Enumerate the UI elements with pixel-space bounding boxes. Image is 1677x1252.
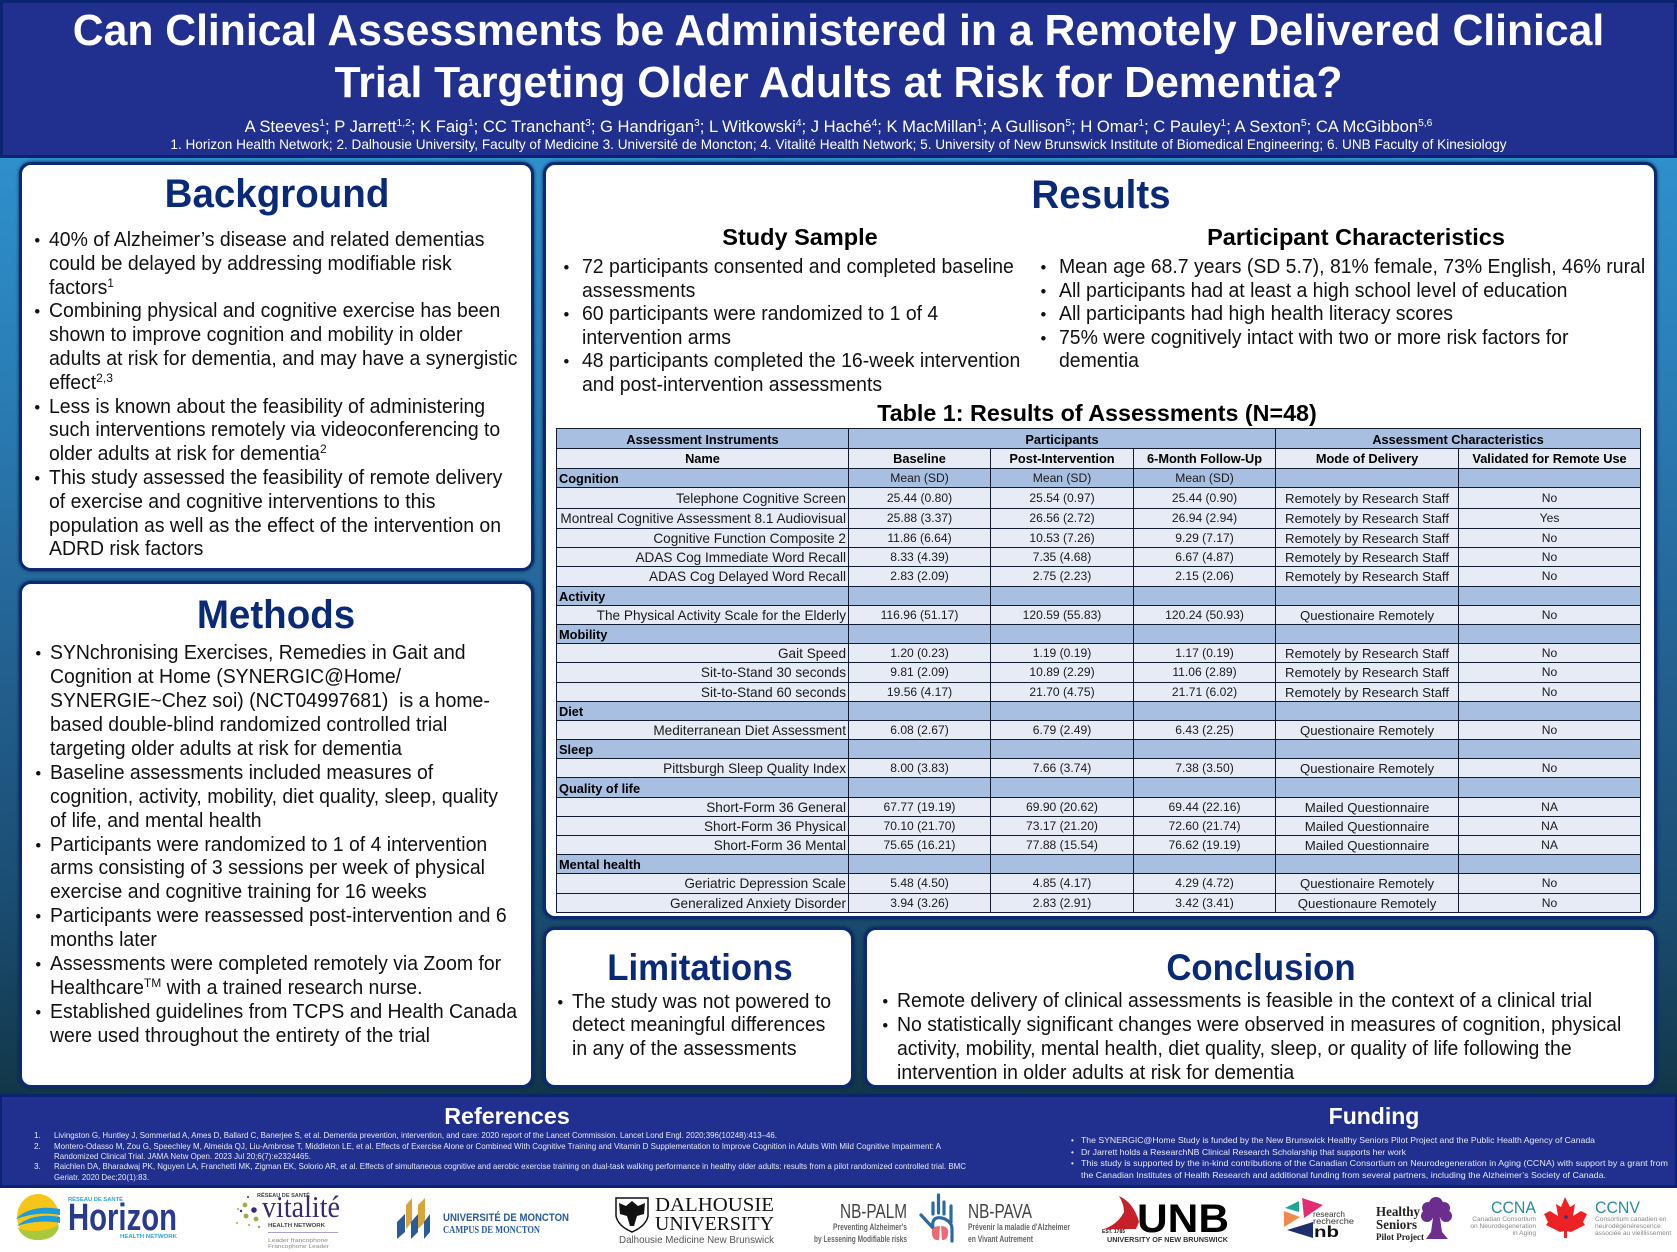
heading: limitations: Limitations — [607, 947, 792, 988]
table: results of assessments: Baseline — [893, 451, 946, 466]
logo: University of New Brunswick: UNIVERSITY OF NEW BRUNSWICK — [1107, 1235, 1229, 1244]
limitations bullet list: The study was not powered to — [572, 990, 831, 1012]
table: results of assessments: Gait Speed — [778, 646, 846, 661]
methods bullet list: exercise and cognitive training for 16 weeks — [50, 881, 427, 903]
logo: Vitalité Health Network: Francophone Leader — [268, 1244, 329, 1250]
table: results of assessments: 25.88 (3.37) — [887, 511, 952, 525]
subheading: study sample: Study Sample — [722, 224, 878, 250]
table: results of assessments: 6.08 (2.67) — [890, 723, 949, 737]
title: Can Clinical Assessments be Administered in a Remotely Delivered Clinical — [73, 6, 1604, 55]
conclusion bullet list: No statistically significant changes were observed in measures of cognition, physical — [897, 1014, 1621, 1036]
table: results of assessments: Remotely by Research Staff — [1285, 646, 1449, 661]
study sample bullet list: 60 participants were randomized to 1 of 4 — [582, 303, 938, 325]
table: results of assessments: Diet — [559, 704, 583, 719]
table: results of assessments: Mental health — [559, 857, 641, 872]
table: results of assessments: Validated for Remote Use — [1472, 451, 1627, 466]
logo: NB-PALM / NB-PAVA: NB-PAVA — [968, 1201, 1032, 1223]
table: results of assessments: No — [1542, 531, 1557, 545]
table: results of assessments: 6.43 (2.25) — [1175, 723, 1234, 737]
methods bullet list: Baseline assessments included measures of — [50, 762, 433, 784]
table: results of assessments: 6.67 (4.87) — [1175, 550, 1234, 564]
table: results of assessments: Questionaire Remotely — [1300, 608, 1434, 623]
authors: A Steeves1; P Jarrett1,2; K Faig1; CC Tranchant3; G Handrigan3; L Witkowski4; J Haché4; K MacMillan1; A Gullison5; H Omar1; C Pauley1; A Sexton5; CA McGibbon5,6 — [245, 117, 1432, 136]
table: results of assessments: No — [1542, 665, 1557, 679]
logo: Dalhousie University — [616, 1194, 775, 1246]
table: results of assessments: Mean (SD) — [1033, 471, 1091, 485]
table: results of assessments: Pittsburgh Sleep Quality Index — [663, 761, 846, 776]
methods bullet list: Participants were randomized to 1 of 4 intervention — [50, 834, 487, 856]
table: results of assessments: No — [1542, 646, 1557, 660]
background bullet list — [35, 229, 517, 560]
methods bullet list: months later — [50, 929, 157, 951]
table: results of assessments: Mediterranean Diet Assessment — [653, 723, 846, 738]
logo: CCNA / CCNV: Canadian Consortium — [1472, 1216, 1536, 1223]
participant characteristics bullet list — [1041, 256, 1645, 372]
table: results of assessments: 7.38 (3.50) — [1175, 761, 1234, 775]
table: results of assessments: Remotely by Research Staff — [1285, 511, 1449, 526]
table: results of assessments: No — [1542, 685, 1557, 699]
table: results of assessments: Remotely by Research Staff — [1285, 685, 1449, 700]
background bullet list: shown to improve cognition and mobility in older — [49, 324, 462, 346]
table: results of assessments: No — [1542, 491, 1557, 505]
logo: Vitalité Health Network: vitalité — [262, 1189, 340, 1224]
background bullet list: of exercise and cognitive interventions to this — [49, 491, 435, 513]
panel: results — [543, 162, 1657, 919]
table: results of assessments: 73.17 (21.20) — [1026, 819, 1098, 833]
funding list: This study is supported by the in-kind contributions of the Canadian Consortium on Neurodegeneration in Aging (CCNA) with support by a grant from — [1081, 1159, 1668, 1168]
logo: NB-PALM / NB-PAVA: Prévenir la maladie d'Alzheimer — [968, 1222, 1070, 1232]
panel: background — [19, 162, 534, 571]
table: results of assessments: Quality of life — [559, 781, 640, 796]
study sample bullet list: 48 participants completed the 16-week intervention — [582, 350, 1020, 372]
logo: CCNA / CCNV: CCNA — [1491, 1198, 1537, 1217]
table: results of assessments: Remotely by Research Staff — [1285, 491, 1449, 506]
table: results of assessments: Telephone Cognitive Screen — [676, 491, 846, 506]
table: results of assessments: 2.75 (2.23) — [1033, 569, 1091, 583]
logo: Université de Moncton: UNIVERSITÉ DE MONCTON — [443, 1211, 569, 1224]
methods bullet list: Cognition at Home (SYNERGIC@Home/ — [50, 666, 401, 688]
logo: NB-PALM / NB-PAVA: en Vivant Autrement — [968, 1234, 1033, 1244]
title — [73, 6, 1604, 107]
table: results of assessments: No — [1542, 761, 1557, 775]
participant characteristics bullet list: All participants had at least a high school level of education — [1059, 280, 1567, 302]
table: results of assessments: Assessment Characteristics — [1372, 432, 1544, 446]
methods bullet list: SYNERGIE~Chez soi) (NCT04997681) is a home- — [50, 690, 490, 712]
table: results of assessments: Short-Form 36 General — [706, 800, 846, 815]
methods bullet list: HealthcareTM with a trained research nurse. — [50, 976, 423, 999]
table: results of assessments: Mailed Questionnaire — [1305, 838, 1429, 853]
funding list: Dr Jarrett holds a ResearchNB Clinical Research Scholarship that supports her work — [1081, 1148, 1407, 1157]
heading: results: Results — [1031, 173, 1171, 217]
logo: NB-PALM / NB-PAVA — [814, 1195, 1070, 1244]
logo: Healthy Seniors Pilot Project — [1376, 1197, 1452, 1243]
table: results of assessments: No — [1542, 550, 1557, 564]
background bullet list: older adults at risk for dementia2 — [49, 442, 327, 465]
logo: CCNA / CCNV: on Neurodegeneration — [1470, 1223, 1536, 1230]
table: results of assessments: No — [1542, 876, 1557, 890]
panel: conclusion — [864, 927, 1657, 1088]
background bullet list: ADRD risk factors — [49, 538, 203, 560]
panel: limitations — [543, 927, 854, 1088]
logo: Research NB: research — [1313, 1209, 1345, 1219]
logo: Dalhousie University: UNIVERSITY — [655, 1213, 774, 1235]
table: results of assessments: ADAS Cog Delayed Word Recall — [649, 569, 846, 584]
panel: methods — [19, 581, 534, 1088]
table: results of assessments: Questionaure Remotely — [1298, 896, 1436, 911]
background bullet list: such interventions remotely via videoconferencing to — [49, 419, 500, 441]
table: results of assessments: Short-Form 36 Mental — [714, 838, 846, 853]
logo: Horizon Health Network — [16, 1194, 177, 1240]
participant characteristics bullet list: dementia — [1059, 350, 1139, 372]
methods bullet list: targeting older adults at risk for dementia — [50, 738, 402, 760]
footer text — [34, 1103, 1668, 1182]
table: results of assessments: 72.60 (21.74) — [1169, 819, 1240, 833]
conclusion bullet list: Remote delivery of clinical assessments is feasible in the context of a clinical trial — [897, 990, 1592, 1012]
conclusion bullet list: activity, mobility, mental health, diet quality, sleep, or quality of life following the — [897, 1038, 1572, 1060]
limitations bullet list — [558, 990, 831, 1060]
table: results of assessments: 8.00 (3.83) — [890, 761, 949, 775]
logo: Vitalité Health Network — [236, 1189, 340, 1250]
methods bullet list: Participants were reassessed post-intervention and 6 — [50, 905, 507, 927]
methods bullet list: Established guidelines from TCPS and Health Canada — [50, 1001, 517, 1023]
reference list: Montero-Odasso M, Zou G, Speechley M, Almeida QJ, Liu-Ambrose T, Middleton LE, et al. Effects of Exercise Alone or Combined With Cognitive Training and Vitamin D Supplementation to Improve Cognition in Adults With Mild Cognitive Impairment: A — [54, 1142, 942, 1151]
logo: Healthy Seniors Pilot Project: Pilot Project — [1376, 1233, 1425, 1243]
participant characteristics bullet list: Mean age 68.7 years (SD 5.7), 81% female, 73% English, 46% rural — [1059, 256, 1645, 278]
logo: Université de Moncton: CAMPUS DE MONCTON — [443, 1225, 541, 1236]
heading: conclusion: Conclusion — [1166, 947, 1355, 988]
methods bullet list: based double-blind randomized controlled trial — [50, 714, 447, 736]
table: results of assessments: 1.17 (0.19) — [1175, 646, 1234, 660]
logo: CCNA / CCNV: associée au vieillissement — [1595, 1230, 1671, 1237]
logo strip — [16, 1189, 1672, 1250]
logo: Horizon Health Network: Horizon — [68, 1197, 177, 1239]
methods bullet list: arms consisting of 3 sessions per week of physical — [50, 857, 485, 879]
reference list: Geriatr. 2020 Dec;20(1):83. — [54, 1173, 149, 1182]
logo: Dalhousie University: Dalhousie Medicine New Brunswick — [619, 1235, 775, 1246]
table: results of assessments: ADAS Cog Immediate Word Recall — [635, 550, 846, 565]
table: results of assessments: 3.42 (3.41) — [1175, 896, 1234, 910]
table: results of assessments: 75.65 (16.21) — [884, 838, 955, 852]
table: results of assessments: 21.70 (4.75) — [1029, 685, 1095, 699]
background bullet list: Less is known about the feasibility of administering — [49, 396, 485, 418]
table: results of assessments: Remotely by Research Staff — [1285, 569, 1449, 584]
study sample bullet list: 72 participants consented and completed baseline — [582, 256, 1014, 278]
background bullet list: adults at risk for dementia, and may have a synergistic — [49, 348, 517, 370]
logo: Research NB — [1284, 1198, 1354, 1241]
logo: CCNA / CCNV: CCNV — [1595, 1198, 1641, 1217]
participant characteristics bullet list: 75% were cognitively intact with two or more risk factors for — [1059, 327, 1568, 349]
background bullet list: population as well as the effect of the intervention on — [49, 515, 501, 537]
table: results of assessments: 3.94 (3.26) — [890, 896, 949, 910]
reference list — [34, 1131, 966, 1182]
table: results of assessments: Mean (SD) — [890, 471, 949, 485]
title: Trial Targeting Older Adults at Risk for Dementia? — [335, 58, 1342, 107]
table: results of assessments: Participants — [1025, 432, 1099, 446]
table: results of assessments: Yes — [1540, 511, 1559, 525]
table: results of assessments: Remotely by Research Staff — [1285, 550, 1449, 565]
table: results of assessments: 2.83 (2.09) — [890, 569, 949, 583]
table: results of assessments: Sit-to-Stand 30 seconds — [701, 665, 846, 680]
study sample bullet list: assessments — [582, 280, 695, 302]
logo: Vitalité Health Network: Leader francophone — [268, 1238, 328, 1244]
table: results of assessments: Activity — [559, 589, 605, 604]
table: results of assessments: 120.24 (50.93) — [1165, 608, 1244, 622]
table: results of assessments: 4.29 (4.72) — [1175, 876, 1234, 890]
funding list — [1071, 1136, 1668, 1180]
background bullet list: Combining physical and cognitive exercise has been — [49, 300, 500, 322]
logo: CCNA / CCNV: in Aging — [1513, 1230, 1536, 1237]
heading: methods: Methods — [197, 593, 355, 637]
logo: CCNA / CCNV: neurodégénérescence — [1595, 1223, 1661, 1230]
table: results of assessments: 11.86 (6.64) — [887, 531, 952, 545]
table: results of assessments: 21.71 (6.02) — [1172, 685, 1237, 699]
reference list: Livingston G, Huntley J, Sommerlad A, Ames D, Ballard C, Banerjee S, et al. Dementia prevention, intervention, and care: 2020 report of the Lancet Commission. Lancet Lond Engl. 2020;396(10248):413–46. — [54, 1131, 777, 1140]
affiliations: 1. Horizon Health Network; 2. Dalhousie University, Faculty of Medicine 3. Université de Moncton; 4. Vitalité Health Network; 5. University of New Brunswick Institute of Biomedical Engineering; 6. UNB Faculty of Kinesiology — [170, 136, 1507, 152]
funding list: the Canadian Institutes of Health Research and additional funding from several partners, including the Alzheimer’s Society of Canada. — [1081, 1171, 1606, 1180]
logo: Horizon Health Network: RÉSEAU DE SANTÉ — [68, 1195, 123, 1203]
table: results of assessments: 116.96 (51.17) — [881, 608, 958, 622]
study sample bullet list — [564, 256, 1020, 396]
logo: Research NB: nb — [1314, 1224, 1339, 1241]
table: results of assessments: Questionaire Remotely — [1300, 723, 1434, 738]
table: results of assessments: 11.06 (2.89) — [1172, 665, 1237, 679]
table: results of assessments: 19.56 (4.17) — [887, 685, 952, 699]
reference list: 3. — [34, 1162, 41, 1171]
table: results of assessments: No — [1542, 569, 1557, 583]
table: results of assessments: The Physical Activity Scale for the Elderly — [597, 608, 846, 623]
table: results of assessments: 69.44 (22.16) — [1169, 800, 1240, 814]
table: results of assessments: NA — [1541, 800, 1558, 814]
table: results of assessments: 25.44 (0.90) — [1172, 491, 1237, 505]
table: results of assessments: 10.53 (7.26) — [1029, 531, 1095, 545]
table: results of assessments: Mobility — [559, 627, 607, 642]
table: results of assessments: 76.62 (19.19) — [1169, 838, 1240, 852]
table: results of assessments: 7.66 (3.74) — [1033, 761, 1091, 775]
table: results of assessments: Geriatric Depression Scale — [684, 876, 846, 891]
funding list: The SYNERGIC@Home Study is funded by the New Brunswick Healthy Seniors Pilot Project and the Public Health Agency of Canada — [1081, 1136, 1595, 1145]
table: results of assessments: 69.90 (20.62) — [1026, 800, 1098, 814]
logo: Research NB: recherche — [1313, 1216, 1354, 1226]
conclusion bullet list — [883, 990, 1621, 1084]
logo: NB-PALM / NB-PAVA: NB-PALM — [840, 1201, 907, 1223]
study sample bullet list: and post-intervention assessments — [582, 374, 882, 396]
logo: CCNA / CCNV: Consortium canadien en — [1595, 1216, 1667, 1223]
table: results of assessments: Cognition — [559, 471, 619, 486]
logo: NB-PALM / NB-PAVA: by Lessening Modifiable risks — [814, 1234, 907, 1244]
table: results of assessments: 9.29 (7.17) — [1175, 531, 1234, 545]
heading: funding: Funding — [1329, 1103, 1419, 1129]
table: results of assessments: 5.48 (4.50) — [890, 876, 949, 890]
subheading: participant characteristics: Participant Characteristics — [1207, 224, 1505, 250]
table: results of assessments: Assessment Instruments — [626, 432, 779, 446]
table: results of assessments: NA — [1541, 838, 1558, 852]
reference list: 1. — [34, 1131, 41, 1140]
table: results of assessments: 67.77 (19.19) — [884, 800, 955, 814]
table: results of assessments: Sleep — [559, 742, 593, 757]
reference list: Raichlen DA, Bharadwaj PK, Nguyen LA, Franchetti MK, Zigman EK, Solorio AR, et al. Effects of simultaneous cognitive and aerobic exercise training on dual-task walking performance in healthy older adults: results from a pilot randomized controlled trial. BMC — [54, 1162, 966, 1171]
heading: background: Background — [165, 172, 389, 216]
table: results of assessments: No — [1542, 896, 1557, 910]
table: results of assessments: 25.44 (0.80) — [887, 491, 952, 505]
table: results of assessments: 7.35 (4.68) — [1033, 550, 1091, 564]
table: results of assessments: Name — [685, 451, 720, 466]
table: results of assessments: 1.19 (0.19) — [1033, 646, 1091, 660]
conclusion bullet list: intervention in older adults at risk for dementia — [897, 1062, 1294, 1084]
background bullet list: 40% of Alzheimer’s disease and related dementias — [49, 229, 484, 251]
logo: University of New Brunswick: EST. 1785 — [1102, 1229, 1125, 1235]
table: results of assessments: 26.94 (2.94) — [1172, 511, 1237, 525]
background bullet list: This study assessed the feasibility of remote delivery — [49, 467, 502, 489]
table title: Table 1: Results of Assessments (N=48) — [877, 400, 1317, 426]
table: results of assessments: Remotely by Research Staff — [1285, 665, 1449, 680]
footer band: references and funding — [0, 1094, 1677, 1188]
table: results of assessments: NA — [1541, 819, 1558, 833]
table: results of assessments: 8.33 (4.39) — [890, 550, 949, 564]
table: results of assessments: Remotely by Research Staff — [1285, 531, 1449, 546]
table: results of assessments: Questionaire Remotely — [1300, 876, 1434, 891]
table: results of assessments: Sit-to-Stand 60 seconds — [701, 685, 846, 700]
table: results of assessments: 120.59 (55.83) — [1023, 608, 1101, 622]
table: results of assessments: 26.56 (2.72) — [1029, 511, 1095, 525]
table: results of assessments: Short-Form 36 Physical — [704, 819, 846, 834]
methods bullet list: were used throughout the entirety of the trial — [50, 1025, 430, 1047]
table: results of assessments: 77.88 (15.54) — [1026, 838, 1098, 852]
table: results of assessments: 1.20 (0.23) — [890, 646, 949, 660]
table: results of assessments — [556, 428, 1641, 913]
logo: NB-PALM / NB-PAVA: Preventing Alzheimer's — [833, 1222, 907, 1232]
table: results of assessments: 25.54 (0.97) — [1029, 491, 1095, 505]
funding list: • — [1071, 1148, 1074, 1157]
header banner — [0, 0, 1677, 158]
logo: Université de Moncton — [397, 1198, 569, 1239]
table: results of assessments: Post-Intervention — [1009, 451, 1115, 466]
methods bullet list: cognition, activity, mobility, diet quality, sleep, quality — [50, 786, 498, 808]
logo: Healthy Seniors Pilot Project: Seniors — [1376, 1217, 1417, 1232]
reference list: Randomized Clinical Trial. JAMA Netw Open. 2023 Jul 20;6(7):e2324465. — [54, 1152, 311, 1161]
background bullet list: could be delayed by addressing modifiable risk — [49, 253, 452, 275]
table: results of assessments: Questionaire Remotely — [1300, 761, 1434, 776]
methods bullet list: of life, and mental health — [50, 810, 262, 832]
background bullet list: effect2,3 — [49, 371, 113, 394]
heading: references: References — [444, 1103, 570, 1129]
logo: University of New Brunswick: UNB — [1137, 1197, 1229, 1241]
methods bullet list — [36, 642, 518, 1047]
table: results of assessments: 2.83 (2.91) — [1033, 896, 1091, 910]
methods bullet list: Assessments were completed remotely via Zoom for — [50, 953, 501, 975]
table: results of assessments: 70.10 (21.70) — [884, 819, 955, 833]
logo: Horizon Health Network: HEALTH NETWORK — [120, 1234, 177, 1240]
logo: University of New Brunswick — [1102, 1196, 1229, 1244]
table: results of assessments: Mode of Delivery — [1316, 451, 1418, 466]
logo: CCNA / CCNV — [1470, 1197, 1671, 1238]
limitations bullet list: in any of the assessments — [572, 1038, 797, 1060]
table: results of assessments: Mailed Questionnaire — [1305, 819, 1429, 834]
limitations bullet list: detect meaningful differences — [572, 1014, 825, 1036]
logo: Dalhousie University: DALHOUSIE — [655, 1194, 774, 1216]
logo: Vitalité Health Network: RÉSEAU DE SANTÉ — [257, 1191, 311, 1199]
study sample bullet list: intervention arms — [582, 327, 731, 349]
table: results of assessments: No — [1542, 723, 1557, 737]
table: results of assessments: 2.15 (2.06) — [1175, 569, 1234, 583]
background bullet list: factors1 — [49, 276, 114, 299]
funding list: • — [1071, 1136, 1074, 1145]
participant characteristics bullet list: All participants had high health literacy scores — [1059, 303, 1453, 325]
logo: Vitalité Health Network: HEALTH NETWORK — [268, 1223, 325, 1229]
funding list: • — [1071, 1159, 1074, 1168]
table: results of assessments: 9.81 (2.09) — [890, 665, 949, 679]
reference list: 2. — [34, 1142, 41, 1151]
table: results of assessments: 4.85 (4.17) — [1033, 876, 1091, 890]
table: results of assessments: 6-Month Follow-Up — [1147, 451, 1262, 466]
table: results of assessments: Cognitive Function Composite 2 — [653, 531, 846, 546]
table: results of assessments: 6.79 (2.49) — [1033, 723, 1091, 737]
table: results of assessments: Generalized Anxiety Disorder — [670, 896, 846, 911]
table: results of assessments: Montreal Cognitive Assessment 8.1 Audiovisual — [560, 511, 846, 526]
table: results of assessments: No — [1542, 608, 1557, 622]
table: results of assessments: Mailed Questionnaire — [1305, 800, 1429, 815]
logo: Healthy Seniors Pilot Project: Healthy — [1376, 1204, 1420, 1219]
methods bullet list: SYNchronising Exercises, Remedies in Gait and — [50, 642, 466, 664]
table: results of assessments: Mean (SD) — [1175, 471, 1234, 485]
table: results of assessments: 10.89 (2.29) — [1029, 665, 1095, 679]
